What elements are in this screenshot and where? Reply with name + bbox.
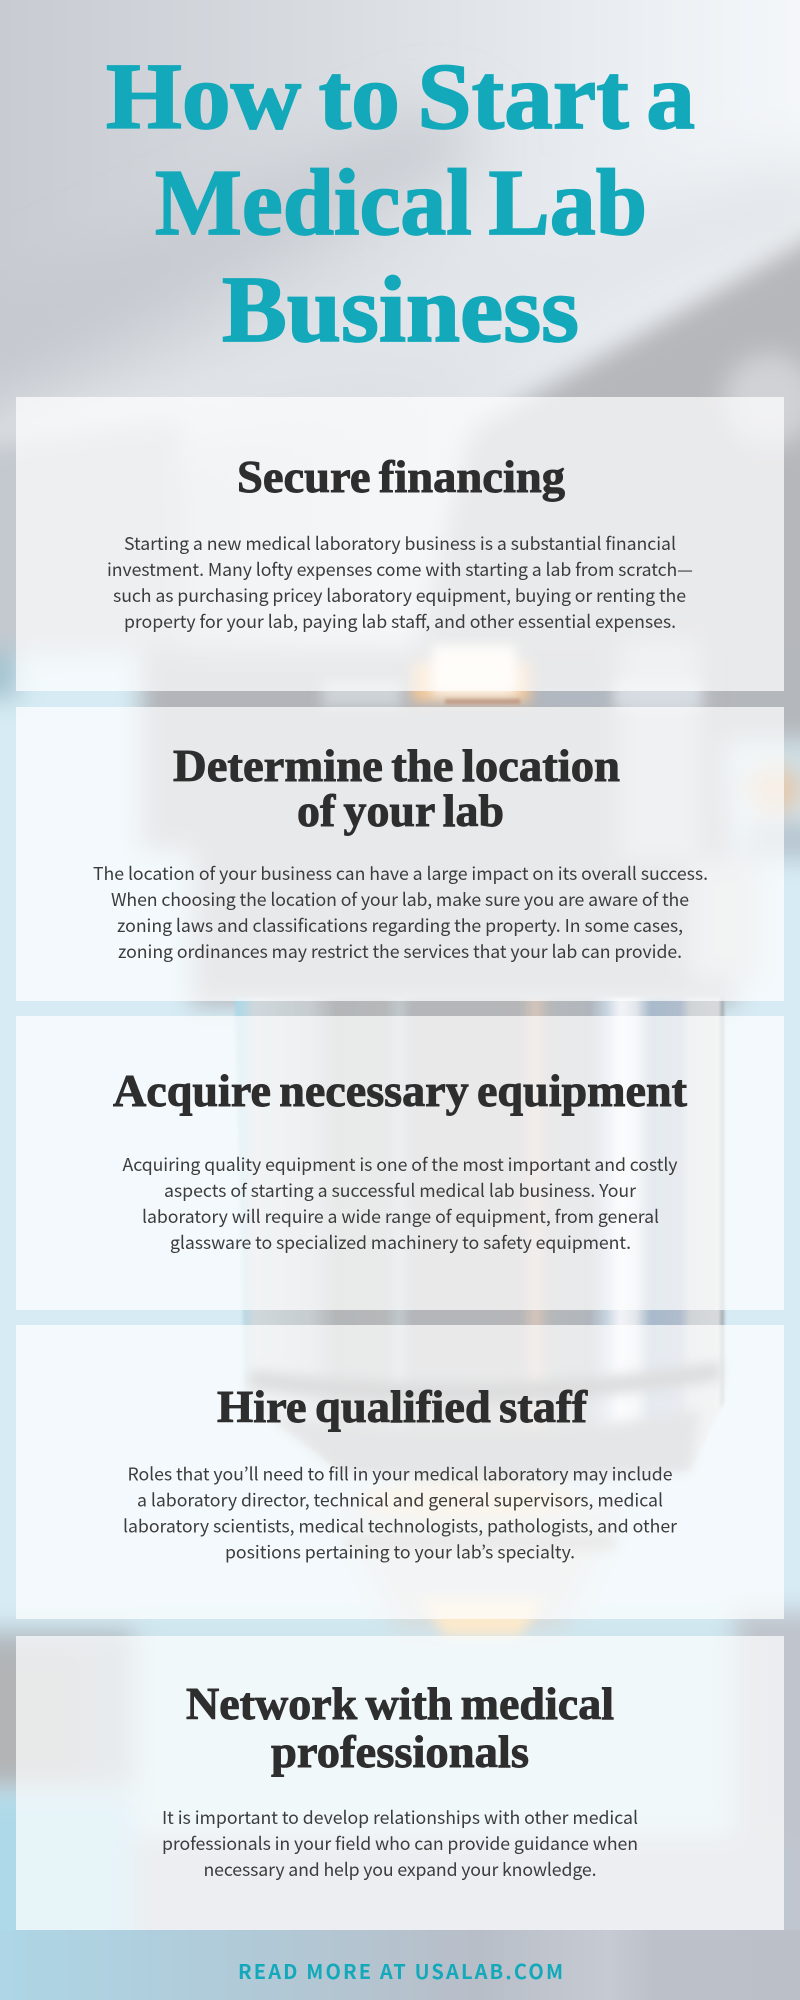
text: secure financing (107, 530, 693, 634)
text: acquire necessary equipment (122, 1151, 678, 1255)
text: acquire necessary equipment: glassware to specialized machinery to safety equipment. (170, 1229, 631, 1255)
panel: determine the location (16, 707, 784, 1001)
text: network with medical professionals: professionals in your field who can provide guidance when (162, 1830, 638, 1856)
title: How to Start a (106, 45, 695, 149)
text: determine the location: zoning laws and classifications regarding the property. In some cases, (117, 912, 683, 938)
microscope objective (235, 998, 725, 1470)
heading: hire qualified staff: Hire qualified staff (217, 1382, 588, 1432)
text: determine the location: When choosing the location of your lab, make sure you are aware of the (111, 886, 689, 912)
text: hire qualified staff: positions pertaining to your lab’s specialty. (225, 1538, 575, 1564)
heading: determine the location (173, 741, 620, 836)
title: Business (222, 258, 579, 362)
text: secure financing: Starting a new medical laboratory business is a substantial financial (124, 530, 676, 556)
text: acquire necessary equipment: aspects of starting a successful medical lab business. Your (164, 1177, 636, 1203)
text: secure financing: such as purchasing pricey laboratory equipment, buying or renting the (113, 582, 686, 608)
text: acquire necessary equipment: laboratory will require a wide range of equipment, from general (142, 1203, 659, 1229)
heading: secure financing: Secure financing (237, 452, 566, 502)
text: secure financing: investment. Many lofty expenses come with starting a lab from scratch— (107, 556, 693, 582)
text: secure financing: property for your lab, paying lab staff, and other essential expenses. (124, 608, 676, 634)
text: determine the location (93, 860, 708, 964)
text: network with medical professionals: necessary and help you expand your knowledge. (204, 1856, 596, 1882)
text: hire qualified staff (123, 1460, 677, 1564)
text: determine the location: zoning ordinances may restrict the services that your lab can provide. (118, 938, 682, 964)
heading: network with medical professionals: Network with medical (186, 1679, 614, 1729)
text: network with medical professionals (162, 1804, 638, 1882)
heading: network with medical professionals (186, 1679, 614, 1777)
panel: network with medical professionals (16, 1636, 784, 1930)
heading: network with medical professionals: professionals (271, 1727, 529, 1777)
footer band (0, 1930, 800, 2000)
heading: acquire necessary equipment: Acquire necessary equipment (113, 1066, 687, 1116)
title: Medical Lab (155, 151, 647, 255)
text: hire qualified staff: a laboratory director, technical and general supervisors, medical (137, 1486, 663, 1512)
text: hire qualified staff: Roles that you’ll need to fill in your medical laboratory may include (128, 1460, 673, 1486)
panel: secure financing (16, 397, 784, 691)
panel: hire qualified staff (16, 1325, 784, 1619)
text: network with medical professionals: It is important to develop relationships with other medical (162, 1804, 638, 1830)
text: determine the location: The location of your business can have a large impact on its overall success. (93, 860, 708, 886)
title (106, 45, 695, 362)
heading: determine the location: of your lab (297, 786, 504, 836)
footer link: READ MORE AT USALAB.COM (238, 1956, 563, 1985)
text: acquire necessary equipment: Acquiring quality equipment is one of the most important and costly (122, 1151, 678, 1177)
text: hire qualified staff: laboratory scientists, medical technologists, pathologists, and other (123, 1512, 677, 1538)
heading: determine the location: Determine the location (173, 741, 620, 791)
panel: acquire necessary equipment (16, 1016, 784, 1310)
